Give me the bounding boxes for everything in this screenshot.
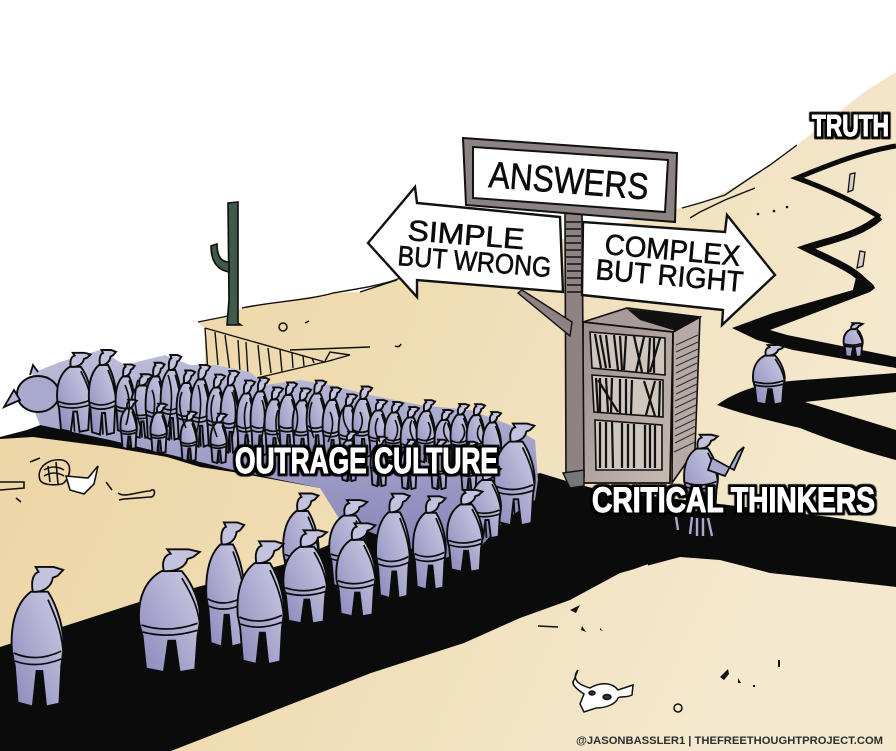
sign: simple but wrong arrow: SIMPLE	[406, 215, 526, 256]
travelers on the road to truth	[753, 173, 865, 404]
sand marks and pebbles	[279, 321, 770, 712]
cactus	[211, 202, 241, 325]
road: upper wedge	[0, 424, 330, 488]
ridge lines	[198, 145, 797, 322]
label: hate, division, intolerance: HATE, DIVISION,	[5, 258, 194, 321]
footer credit: @JASONBASSLER1 | THEFREETHOUGHTPROJECT.COM	[576, 735, 883, 747]
sign: answers: ANSWERS	[487, 154, 650, 208]
back crowd: outrage culture	[4, 350, 538, 560]
label: outrage culture: OUTRAGE CULTURE	[235, 440, 498, 481]
dead skeleton and bones	[0, 458, 154, 502]
front crowd figures	[12, 424, 535, 707]
sign: simple but wrong arrow: BUT WRONG	[397, 240, 552, 283]
road: wide black path	[0, 473, 896, 751]
sign: answers	[463, 138, 677, 222]
sign: complex but right arrow: BUT RIGHT	[594, 254, 745, 299]
bookshelf	[582, 308, 700, 483]
sign: simple but wrong arrow	[368, 187, 563, 297]
cow skull	[573, 670, 633, 712]
critical thinker reading	[676, 435, 744, 536]
label: hate, division, intolerance	[5, 258, 194, 350]
road to truth: winding path	[717, 146, 896, 460]
label: hate, division, intolerance: INTOLERANCE	[23, 292, 187, 350]
signpost	[518, 213, 584, 488]
sign: complex but right arrow: COMPLEX	[603, 229, 742, 273]
sign: complex but right arrow	[582, 215, 775, 325]
cliff edge	[205, 328, 370, 378]
